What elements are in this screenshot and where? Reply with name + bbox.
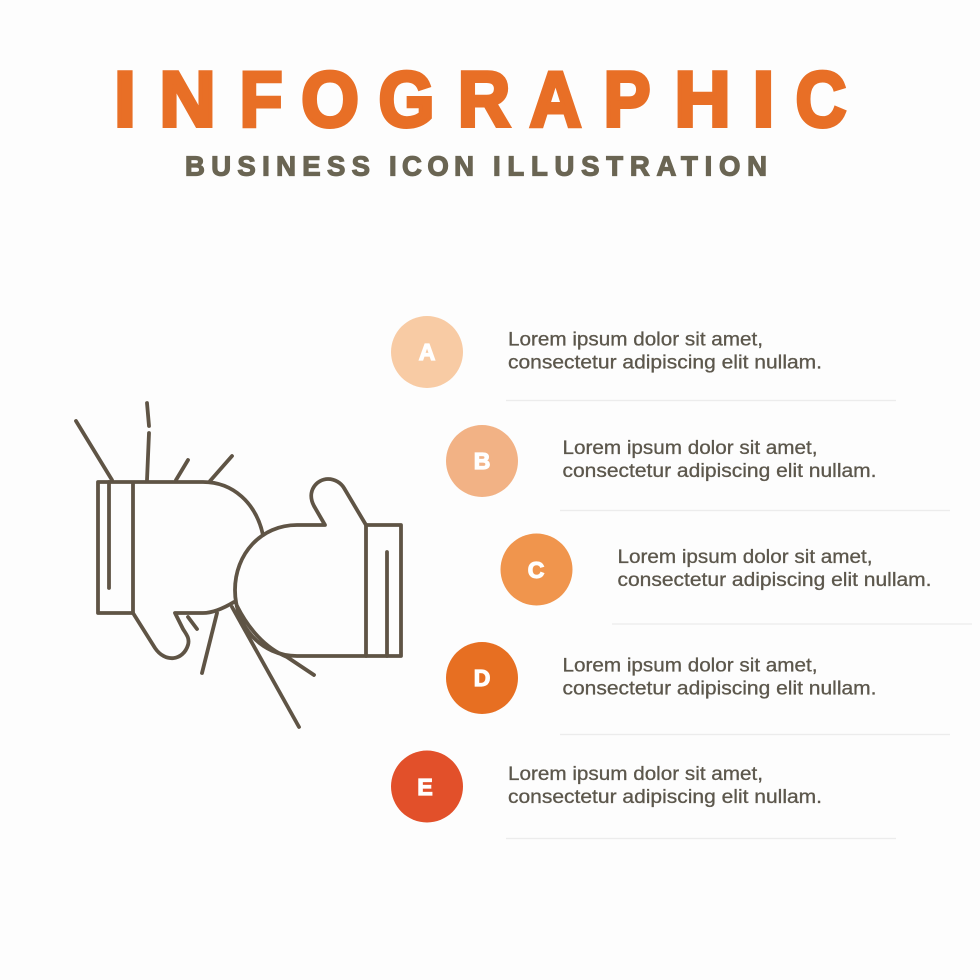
title: F bbox=[240, 56, 282, 143]
title: O bbox=[301, 56, 359, 143]
title: N bbox=[159, 55, 216, 143]
text E bbox=[508, 764, 822, 808]
text C: Lorem ipsum dolor sit amet, bbox=[618, 547, 872, 568]
badge D bbox=[446, 642, 518, 714]
text B: Lorem ipsum dolor sit amet, bbox=[562, 438, 818, 459]
list item B bbox=[446, 425, 950, 510]
badge B: B bbox=[474, 448, 490, 474]
text C: consectetur adipiscing elit nullam. bbox=[618, 570, 932, 591]
icon: two mittens bumping with impact lines bbox=[76, 403, 401, 727]
list item D bbox=[446, 642, 950, 734]
list item A bbox=[391, 316, 896, 400]
title: G bbox=[379, 55, 434, 143]
title: I bbox=[114, 55, 136, 143]
badge C bbox=[500, 534, 572, 606]
title: H bbox=[674, 55, 731, 143]
impact lines top bbox=[76, 403, 232, 481]
text C bbox=[618, 547, 932, 591]
badge B bbox=[446, 425, 518, 497]
list item C bbox=[500, 534, 972, 624]
title: C bbox=[796, 56, 846, 143]
text B bbox=[562, 438, 876, 482]
impact lines bottom bbox=[188, 606, 314, 727]
subtitle: BUSINESS bbox=[185, 150, 370, 182]
text D bbox=[562, 656, 876, 700]
title: I bbox=[753, 55, 774, 143]
text D: Lorem ipsum dolor sit amet, bbox=[562, 656, 818, 676]
text E: consectetur adipiscing elit nullam. bbox=[508, 787, 822, 808]
title: A bbox=[530, 55, 581, 143]
title: P bbox=[604, 56, 650, 143]
badge A: A bbox=[419, 339, 435, 365]
right mitten bbox=[235, 479, 401, 656]
badge D: D bbox=[474, 665, 490, 691]
text A: consectetur adipiscing elit nullam. bbox=[508, 352, 822, 374]
subtitle: ILLUSTRATION bbox=[493, 150, 767, 182]
badge C: C bbox=[528, 557, 544, 583]
badge E bbox=[391, 750, 463, 822]
subtitle: ICON bbox=[389, 150, 474, 182]
text E: Lorem ipsum dolor sit amet, bbox=[508, 764, 763, 785]
list item E bbox=[391, 750, 896, 838]
left mitten bbox=[98, 482, 263, 658]
badge E: E bbox=[417, 774, 433, 800]
badge A bbox=[391, 316, 463, 388]
title bbox=[114, 55, 846, 143]
subtitle bbox=[185, 150, 767, 182]
text A: Lorem ipsum dolor sit amet, bbox=[508, 330, 763, 350]
text B: consectetur adipiscing elit nullam. bbox=[562, 461, 876, 482]
text D: consectetur adipiscing elit nullam. bbox=[562, 678, 876, 700]
title: R bbox=[458, 56, 510, 143]
text A bbox=[508, 330, 822, 374]
